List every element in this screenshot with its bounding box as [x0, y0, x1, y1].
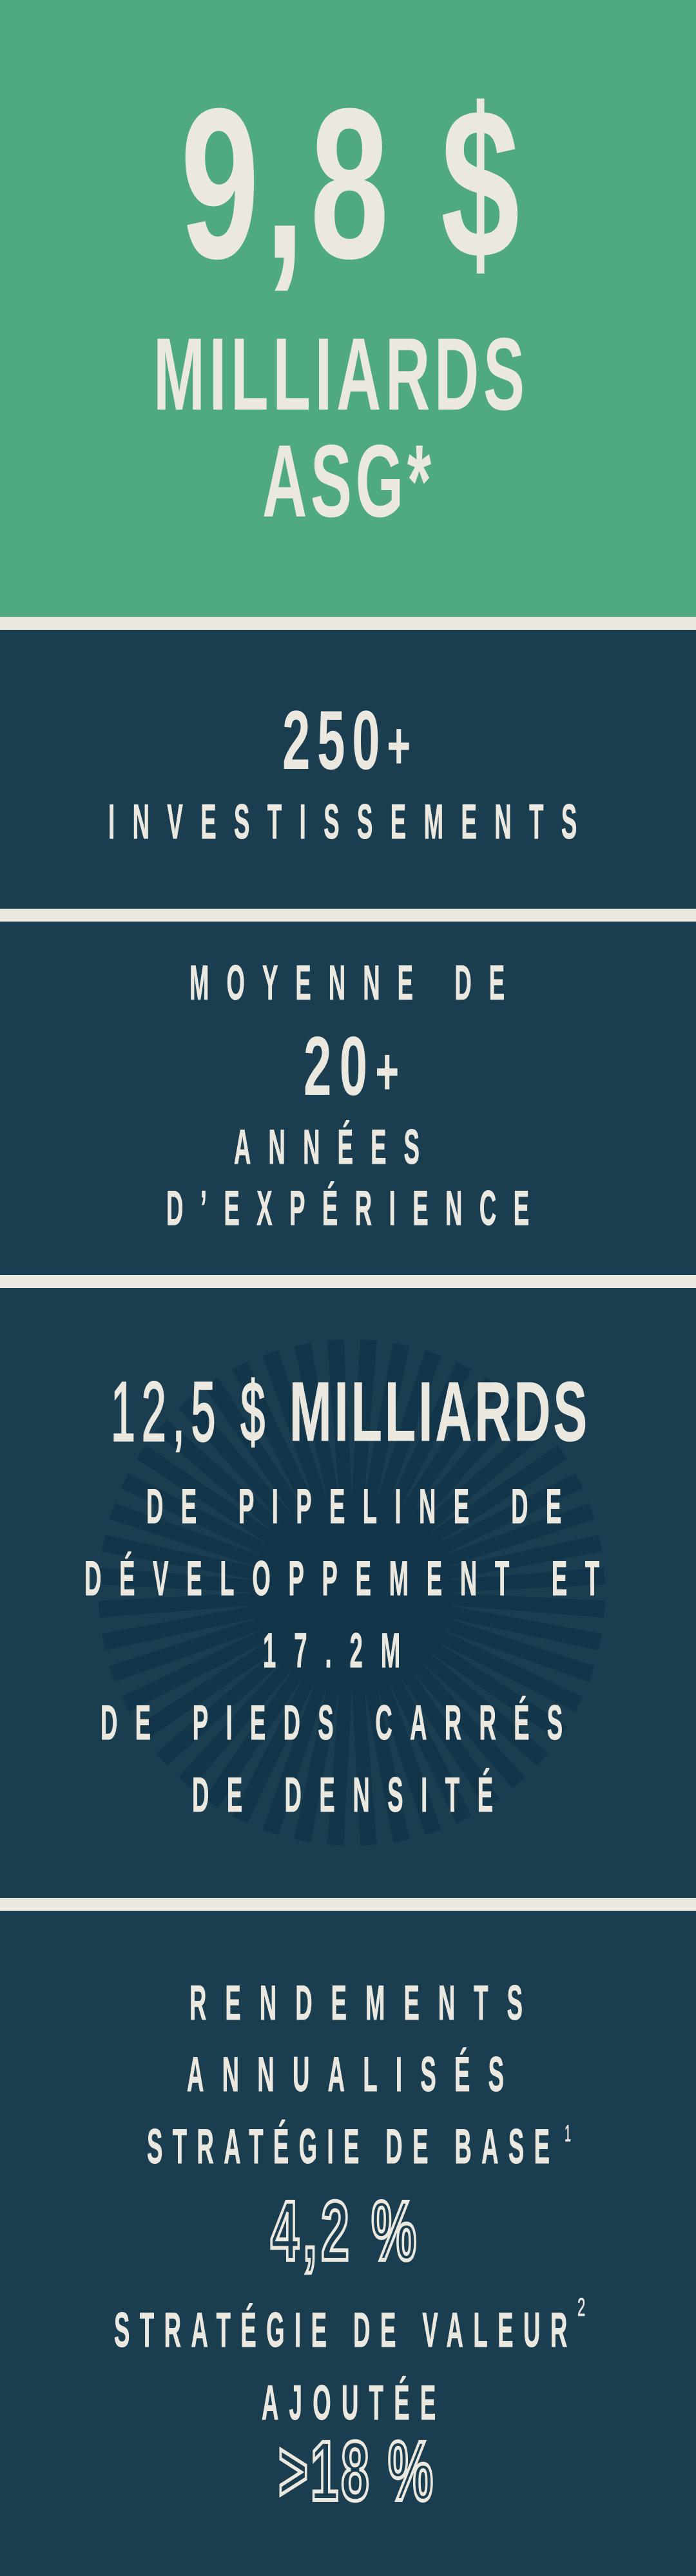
figure: >18 %: >18 % [278, 2423, 433, 2518]
label: stratégie de valeur: STRATÉGIE DE VALEUR [114, 2302, 567, 2358]
panel: total assets [0, 0, 696, 617]
panel: annualized returns [0, 1911, 696, 2576]
label: annualisés: ANNUALISÉS [187, 2047, 504, 2102]
panel: experience [0, 922, 696, 1275]
label: de densité: DE DENSITÉ [192, 1767, 493, 1823]
label: ajoutée: AJOUTÉE [262, 2375, 436, 2430]
label: de pieds carrés: DE PIEDS CARRÉS [101, 1695, 563, 1750]
icon: starburst [50, 1291, 653, 1894]
panel: pipeline [0, 1288, 696, 1898]
footnote mark 2: 2 [577, 2293, 585, 2322]
label: stratégie de base: STRATÉGIE DE BASE [147, 2119, 550, 2174]
label: rendements: RENDEMENTS [189, 1975, 523, 2031]
heading: milliards: MILLIARDS [153, 317, 525, 431]
label: années: ANNÉES [234, 1119, 420, 1175]
figure: 12,5 $ milliards [111, 1364, 587, 1459]
figure: 9,8 $: $ [441, 64, 519, 303]
heading: ASG: ASG* [262, 424, 432, 538]
label: d'expérience: D’EXPÉRIENCE [166, 1180, 529, 1236]
figure: 9,8 $: 9,8 [180, 64, 389, 303]
label: moyenne de: MOYENNE DE [189, 955, 505, 1010]
figure: 12,5 $ milliards: 12,5 $ [111, 1365, 265, 1459]
label: 17.2M: 17.2M [263, 1623, 400, 1678]
figure: 9,8 $ [180, 64, 519, 303]
label: investissements: INVESTISSEMENTS [108, 794, 577, 849]
figure: 12,5 $ milliards: MILLIARDS [289, 1364, 587, 1459]
figure: 250+: 250+ [282, 693, 411, 787]
figure: 20+: 20+ [304, 1019, 399, 1113]
label: développement et: DÉVELOPPEMENT ET [84, 1551, 599, 1606]
label: de pipeline de: DE PIPELINE DE [146, 1479, 561, 1534]
figure: 4,2 %: 4,2 % [271, 2183, 416, 2278]
panel: investments [0, 630, 696, 909]
footnote mark 1: 1 [565, 2121, 571, 2147]
